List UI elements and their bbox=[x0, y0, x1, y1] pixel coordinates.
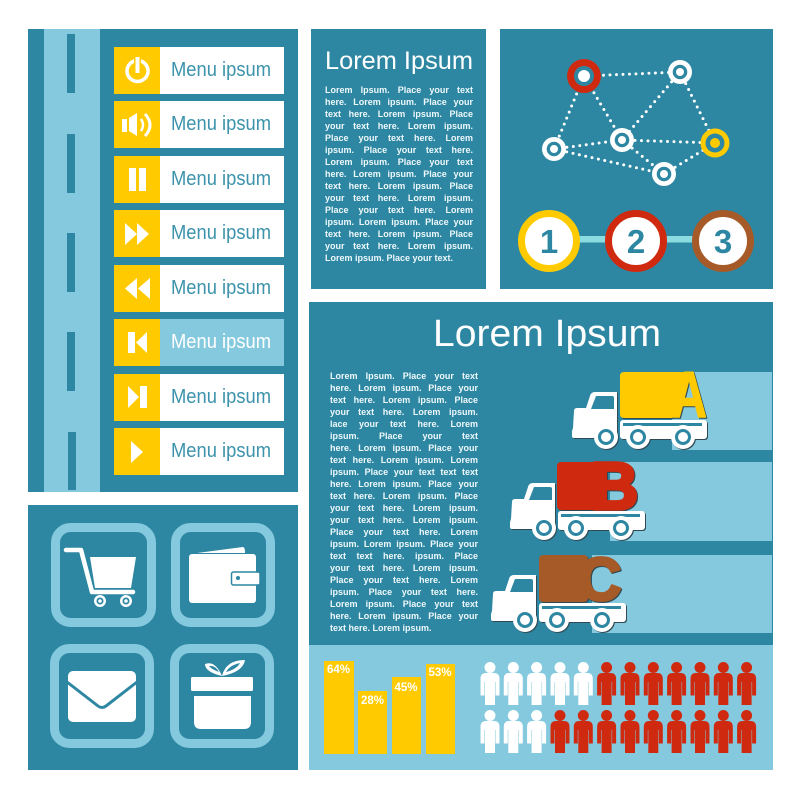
panel: main trucks background and heading: Lorem Ipsum bbox=[433, 313, 661, 355]
text block: main panel body: text here. Lorem ipsum. Place bbox=[330, 395, 478, 405]
bar chart: 28% bbox=[361, 695, 384, 707]
text block: main panel body: Place your text here. Lorem bbox=[330, 527, 478, 537]
panel: main trucks background and heading bbox=[309, 302, 773, 645]
truck C: C bbox=[578, 546, 621, 613]
numbered steps: 3 bbox=[714, 223, 732, 260]
menu item 6: skip back, highlighted: Menu ipsum bbox=[171, 331, 271, 353]
text block: main panel body: your text here. Lorem ipsum. bbox=[330, 563, 478, 573]
bar chart: 53% bbox=[428, 667, 452, 679]
text block: top panel body bbox=[325, 85, 473, 263]
text block: main panel body: ipsum. Place your text here. bbox=[330, 587, 478, 597]
menu item 1: power bbox=[114, 47, 284, 94]
text block: top panel body: your text here. Lorem ipsum. bbox=[325, 193, 473, 203]
road bbox=[44, 29, 100, 492]
numbered steps: 1 bbox=[540, 223, 558, 260]
text block: top panel body: your text here. Lorem ipsum. bbox=[325, 121, 473, 131]
text block: main panel body: your text here. Lorem ipsum. bbox=[330, 407, 478, 417]
text block: top panel body: here. Lorem ipsum. Place your bbox=[325, 169, 473, 179]
truck B: B bbox=[590, 449, 638, 524]
text block: main panel body: here. Lorem ipsum. Place your bbox=[330, 443, 478, 453]
menu item 7: skip forward bbox=[114, 374, 284, 421]
panel: top text background and heading bbox=[311, 29, 486, 289]
icon: gift box bbox=[174, 648, 270, 744]
text block: top panel body: Lorem ipsum. Place your text bbox=[325, 157, 473, 167]
text block: top panel body: ipsum. Place your text here. bbox=[325, 145, 473, 155]
text block: top panel body: Place your text here. Lorem bbox=[325, 205, 473, 215]
text block: main panel body: text here. Lorem ipsum. Place bbox=[330, 491, 478, 501]
text block: top panel body: Lorem ipsum. Place your text. bbox=[325, 253, 453, 263]
pictogram row 1 bbox=[480, 662, 756, 705]
text block: main panel body: here. Lorem ipsum. Place your bbox=[330, 611, 478, 621]
text block: main panel body: text text here. ipsum. Place bbox=[330, 551, 478, 561]
menu item 8: play bbox=[114, 428, 284, 475]
text block: main panel body: here. Lorem ipsum. Place your bbox=[330, 479, 478, 489]
menu item 4: fast forward: Menu ipsum bbox=[171, 222, 271, 244]
text block: main panel body: text here. Lorem ipsum. bbox=[330, 623, 432, 633]
truck A bbox=[572, 358, 707, 449]
text block: main panel body: ipsum. Place your text text text bbox=[330, 467, 478, 477]
truck B bbox=[510, 449, 645, 540]
panel: road and menu bbox=[28, 29, 298, 492]
text block: main panel body: Lorem ipsum. Place your text bbox=[330, 599, 478, 609]
menu item 5: rewind bbox=[114, 265, 284, 312]
text block: top panel body: your text here. Lorem ipsum. bbox=[325, 241, 473, 251]
text block: main panel body bbox=[330, 371, 478, 633]
menu item 4: fast forward bbox=[114, 210, 284, 257]
menu item 5: rewind: Menu ipsum bbox=[171, 277, 271, 299]
text block: main panel body: your text here. Lorem ipsum. bbox=[330, 503, 478, 513]
menu item 2: speaker: Menu ipsum bbox=[171, 113, 271, 135]
menu item 7: skip forward: Menu ipsum bbox=[171, 386, 271, 408]
network diagram bbox=[542, 59, 730, 186]
text block: top panel body: here. Lorem ipsum. Place your bbox=[325, 97, 473, 107]
text block: top panel body: Lorem Ipsum. Place your text bbox=[325, 85, 473, 95]
bar chart: 45% bbox=[394, 682, 418, 694]
menu item 3: pause: Menu ipsum bbox=[171, 168, 271, 190]
menu item 3: pause bbox=[114, 156, 284, 203]
text block: main panel body: text here. Lorem ipsum. Lorem bbox=[330, 455, 478, 465]
pictogram row 2 bbox=[480, 710, 756, 753]
numbered steps bbox=[522, 214, 750, 268]
menu item 6: skip back, highlighted bbox=[114, 319, 284, 366]
menu item 2: speaker bbox=[114, 101, 284, 148]
bar chart: 64% bbox=[327, 664, 350, 676]
truck A: A bbox=[671, 358, 707, 431]
text block: main panel body: here. Lorem ipsum. Place your bbox=[330, 383, 478, 393]
text block: top panel body: text here. Lorem ipsum. Place bbox=[325, 229, 473, 239]
text block: main panel body: lace your text here. Lorem bbox=[330, 419, 478, 429]
menu item 1: power: Menu ipsum bbox=[171, 59, 271, 81]
text block: top panel body: text here. Lorem ipsum. Place bbox=[325, 109, 473, 119]
panel: network and numbered steps bbox=[500, 29, 773, 289]
text block: main panel body: ipsum. Lorem ipsum. Place your bbox=[330, 539, 478, 549]
icon: wallet bbox=[176, 528, 270, 622]
panel: top text background and heading: Lorem Ipsum bbox=[325, 47, 473, 75]
text block: top panel body: ipsum. Lorem ipsum. Place your bbox=[325, 217, 473, 227]
icon: envelope bbox=[54, 648, 150, 744]
panel: shopping icons bbox=[28, 505, 298, 770]
menu item 8: play: Menu ipsum bbox=[171, 440, 271, 462]
panel: statistics bbox=[309, 645, 773, 770]
truck C bbox=[491, 546, 626, 632]
text block: main panel body: your text here. Lorem ipsum. bbox=[330, 515, 478, 525]
text block: top panel body: Place your text here. Lorem bbox=[325, 133, 473, 143]
text block: top panel body: text here. Lorem ipsum. Place bbox=[325, 181, 473, 191]
text block: main panel body: Lorem Ipsum. Place your text bbox=[330, 371, 478, 381]
bar chart bbox=[324, 661, 455, 754]
icon: shopping cart bbox=[56, 528, 152, 622]
text block: main panel body: ipsum. Place your text bbox=[330, 431, 478, 441]
numbered steps: 2 bbox=[627, 223, 645, 260]
text block: main panel body: Place your text here. Lorem bbox=[330, 575, 478, 585]
